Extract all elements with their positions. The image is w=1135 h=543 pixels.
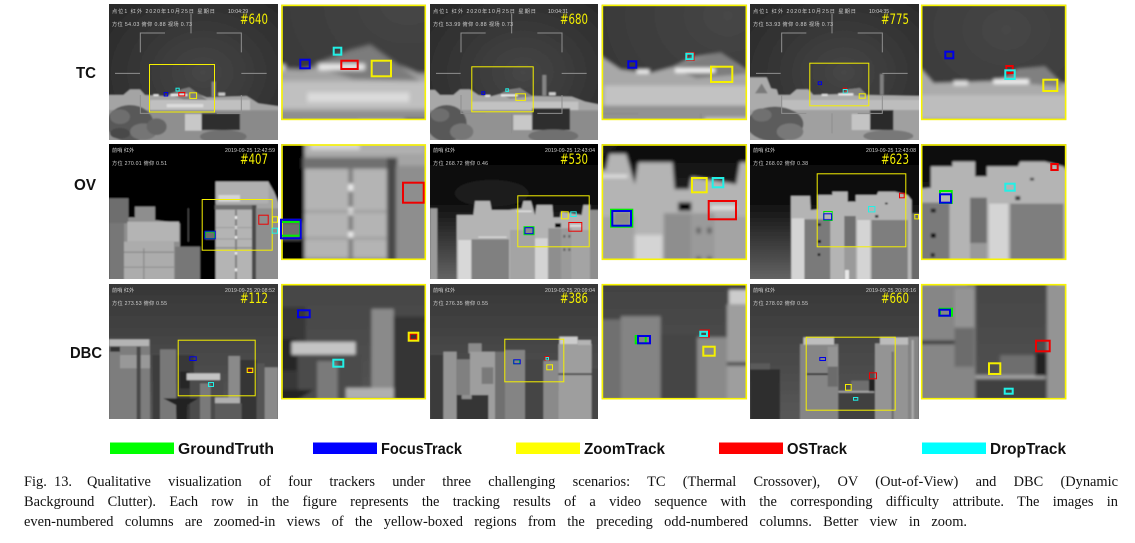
legend: DropTrack: DropTrack (990, 441, 1066, 458)
panel: TC frame 680: 10:04:31 (548, 9, 568, 15)
caption: Background Clutter). Each row in the figure represents the tracking results of a video sequence with the corresponding difficulty attribute. The images in (24, 494, 1118, 510)
panel: OV frame 407: 前哨 红外 (112, 146, 134, 154)
panel: TC frame 680: 点位1 红外 2020年10月25日 星期日 (433, 7, 536, 15)
panel: OV frame 407 (105, 142, 282, 282)
panel: TC frame 680 (427, 2, 602, 143)
panel: OV frame 623: 2019-09-25 12:43:08 (866, 148, 916, 154)
panel: DBC frame 386 (427, 282, 603, 422)
caption: Fig. 13. (24, 474, 72, 490)
panel: DBC frame 386: 前哨 红外 (433, 286, 455, 294)
panel: OV frame 623 (747, 142, 923, 283)
panel: DBC frame 386: 2019-09-25 20:09:04 (545, 288, 595, 294)
panel: DBC frame 112 (105, 282, 282, 422)
panel: OV frame 623: 前哨 红外 (753, 146, 775, 154)
caption: Qualitative visualization of four trackers under three challenging scenarios: TC (Thermal Crossover), OV (Out-of-View) and DBC (Dynamic (87, 474, 1118, 490)
panel: DBC frame 386: #386 (560, 291, 588, 307)
legend: ZoomTrack (516, 441, 665, 458)
panel: TC frame 640: 方位 54.03 俯仰 0.88 视场 0.73 (112, 20, 192, 28)
panel: DBC frame 112: 方位 273.53 俯仰 0.55 (112, 299, 167, 307)
panel: DBC frame 660: 方位 278.02 俯仰 0.55 (753, 299, 808, 307)
panel: OV zoom 407 (53, 8, 455, 340)
panel: TC frame 680: 方位 53.99 俯仰 0.88 视场 0.73 (433, 20, 513, 28)
legend: GroundTruth (110, 441, 274, 458)
panel: OV zoom 623 (826, 87, 1087, 297)
panel: OV frame 407: #407 (240, 152, 268, 168)
caption (24, 474, 1118, 530)
panel: DBC zoom 386 (465, 181, 817, 458)
caption: even-numbered columns are zoomed-in views of the yellow-boxed regions from the preceding odd-numbered columns. Better view in zoom. (24, 514, 967, 530)
legend: OSTrack (719, 441, 847, 458)
panel: DBC frame 112: #112 (240, 291, 268, 307)
panel: TC zoom 640 (140, 0, 627, 205)
legend (110, 441, 1066, 458)
legend: FocusTrack (313, 441, 462, 458)
panel: TC frame 640 (107, 2, 282, 143)
row label: TC: TC (76, 65, 96, 82)
panel: TC frame 775 (747, 2, 923, 143)
panel: OV frame 530: #530 (560, 152, 588, 168)
panel: DBC frame 386: 方位 276.35 俯仰 0.55 (433, 299, 488, 307)
panel: OV frame 407: 方位 270.01 俯仰 0.51 (112, 159, 167, 167)
panel: OV frame 530: 方位 268.72 俯仰 0.46 (433, 159, 488, 167)
row label: DBC: DBC (70, 345, 102, 362)
panel: OV zoom 530 (399, 25, 783, 331)
panel: OV frame 623: #623 (881, 152, 909, 168)
panel: OV frame 530: 前哨 红外 (433, 146, 455, 154)
panel: TC frame 775: #775 (881, 12, 909, 28)
legend: FocusTrack: FocusTrack (381, 441, 462, 458)
panel: TC frame 640: 10:04:29 (228, 9, 248, 15)
panel: DBC zoom 660 (796, 161, 1135, 436)
legend: DropTrack (922, 441, 1066, 458)
panel: TC zoom 680 (496, 0, 917, 186)
panel: OV frame 623: 方位 268.02 俯仰 0.38 (753, 159, 808, 167)
panel: TC frame 775: 方位 53.93 俯仰 0.88 视场 0.73 (753, 20, 833, 28)
panel: DBC frame 660: 2019-09-25 20:09:16 (866, 288, 916, 294)
panel: OV frame 530 (427, 142, 603, 283)
panel: DBC frame 660: 前哨 红外 (753, 286, 775, 294)
panel: DBC zoom 112 (135, 167, 474, 434)
row label: OV: OV (74, 177, 96, 194)
panel: TC frame 680: #680 (560, 12, 588, 28)
panel: DBC frame 112: 2019-09-25 20:08:52 (225, 288, 275, 294)
panel: DBC frame 112: 前哨 红外 (112, 286, 134, 294)
panel: TC frame 640: 点位1 红外 2020年10月25日 星期日 (112, 7, 215, 15)
panel: TC frame 640: #640 (240, 12, 268, 28)
panel: TC frame 775: 10:04:35 (869, 9, 889, 15)
panel: TC zoom 775 (775, 0, 1135, 198)
panel: TC frame 775: 点位1 红外 2020年10月25日 星期日 (753, 7, 856, 15)
panel: OV frame 407: 2019-09-25 12:42:59 (225, 148, 275, 154)
panel: OV frame 530: 2019-09-25 12:43:04 (545, 148, 595, 154)
legend: GroundTruth: GroundTruth (178, 441, 274, 458)
panel: DBC frame 660 (747, 282, 923, 422)
legend: ZoomTrack: ZoomTrack (584, 441, 665, 458)
panel: DBC frame 660: #660 (881, 291, 909, 307)
legend: OSTrack: OSTrack (787, 441, 847, 458)
